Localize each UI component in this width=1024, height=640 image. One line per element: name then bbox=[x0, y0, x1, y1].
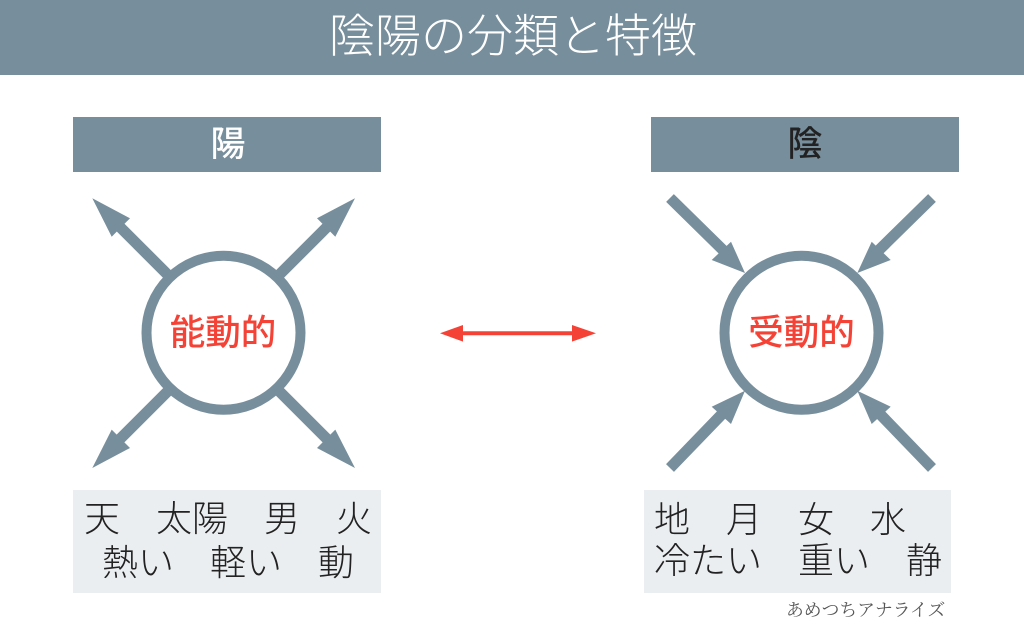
text block: yang attributes: 熱い 軽い 動 bbox=[102, 542, 354, 583]
title banner bbox=[0, 0, 1024, 75]
text block: yin attributes: 地 月 女 水 bbox=[654, 499, 906, 540]
title banner: 陰陽の分類と特徴 bbox=[329, 10, 697, 62]
text block: yin attributes: 冷たい 重い 静 bbox=[654, 540, 942, 581]
diagram: inward arrows around circle: 受動的 bbox=[748, 312, 855, 352]
text block: yang attributes: 天 太陽 男 火 bbox=[84, 498, 372, 539]
diagram: inward arrows around circle bbox=[670, 198, 932, 468]
panel: yin bbox=[644, 117, 959, 593]
double-headed arrow bbox=[440, 325, 596, 342]
heading: yin: 陰 bbox=[787, 125, 823, 164]
diagram: outward arrows around circle bbox=[92, 198, 355, 468]
heading: yin bbox=[651, 117, 959, 172]
heading: yang: 陽 bbox=[210, 125, 246, 164]
text block: yin attributes bbox=[644, 490, 951, 593]
text block: yang attributes bbox=[73, 490, 381, 593]
heading: yang bbox=[73, 117, 381, 172]
diagram: outward arrows around circle: 能動的 bbox=[170, 312, 276, 352]
credit: あめつちアナライズ bbox=[786, 600, 945, 620]
panel: yang bbox=[73, 117, 381, 593]
